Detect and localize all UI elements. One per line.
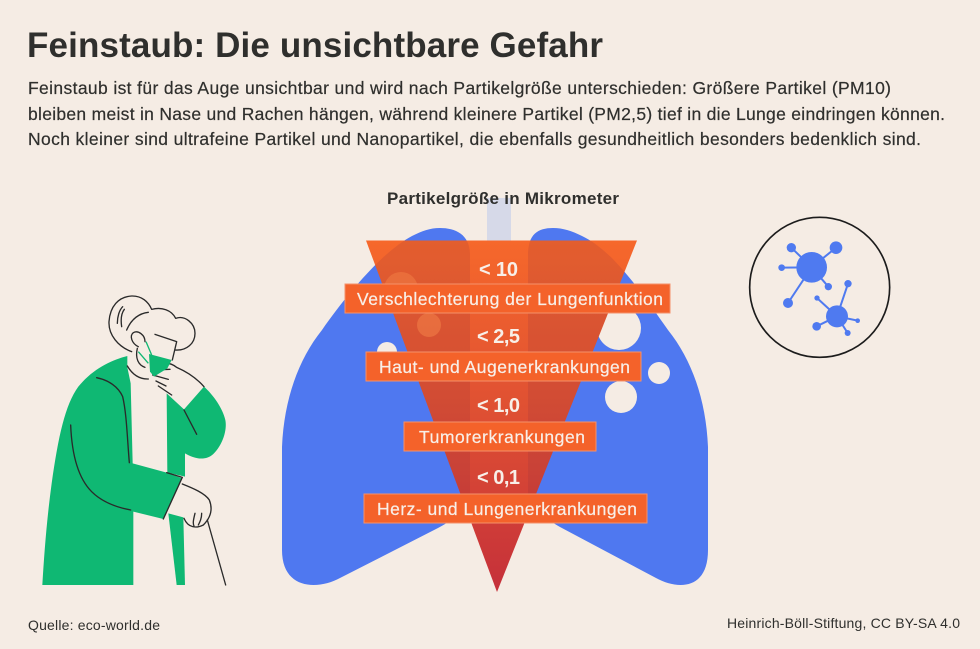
hand at mask [153, 363, 204, 395]
effect: skin and eyes: Haut- und Augenerkrankungen [379, 357, 630, 377]
ear and face [131, 332, 145, 347]
credit: Heinrich-Böll-Stiftung, CC BY-SA 4.0 [727, 615, 960, 631]
size label: below 1.0: < 1,0 [477, 395, 520, 417]
illustration: older person with mask and cane [42, 296, 226, 585]
icon: particles in circle [750, 217, 890, 357]
effect: lung function [345, 284, 670, 313]
hair [109, 296, 195, 352]
left lung [282, 228, 470, 585]
intro text: Feinstaub ist für das Auge unsichtbar und wird nach Partikelgröße unterschieden: Größere Partikel (PM10) [28, 78, 891, 98]
effect: tumours: Tumorerkrankungen [419, 427, 585, 447]
source: Quelle: eco-world.de [28, 617, 160, 633]
coat [42, 356, 226, 585]
size label: below 2.5: < 2,5 [477, 326, 520, 348]
mask [149, 354, 172, 377]
hand on cane [182, 484, 211, 527]
effect: heart and lungs: Herz- und Lungenerkrankungen [377, 499, 637, 519]
effect: tumours [404, 422, 596, 451]
particle funnel [366, 240, 637, 592]
chart heading: Partikelgröße in Mikrometer [387, 189, 619, 208]
size label: below 10: < 10 [479, 259, 518, 281]
effect: heart and lungs [364, 494, 647, 523]
effect: lung function: Verschlechterung der Lungenfunktion [357, 289, 663, 309]
cane [207, 520, 226, 585]
trachea [487, 198, 511, 242]
effect: skin and eyes [366, 352, 641, 381]
size label: below 0.1: < 0,1 [477, 467, 520, 489]
title: Feinstaub: Die unsichtbare Gefahr [27, 26, 603, 65]
lung diagram [282, 198, 708, 592]
intro text: bleiben meist in Nase und Rachen hängen, während kleinere Partikel (PM2,5) tief in die Lunge eindringen können. [28, 104, 945, 124]
intro text: Noch kleiner sind ultrafeine Partikel und Nanopartikel, die ebenfalls gesundheitlich besonders bedenklich sind. [28, 129, 921, 149]
lung bubbles [377, 306, 670, 413]
lung shading inside funnel [376, 240, 624, 494]
right lung [528, 228, 708, 585]
intro text [28, 78, 945, 149]
coat lines [97, 378, 129, 463]
